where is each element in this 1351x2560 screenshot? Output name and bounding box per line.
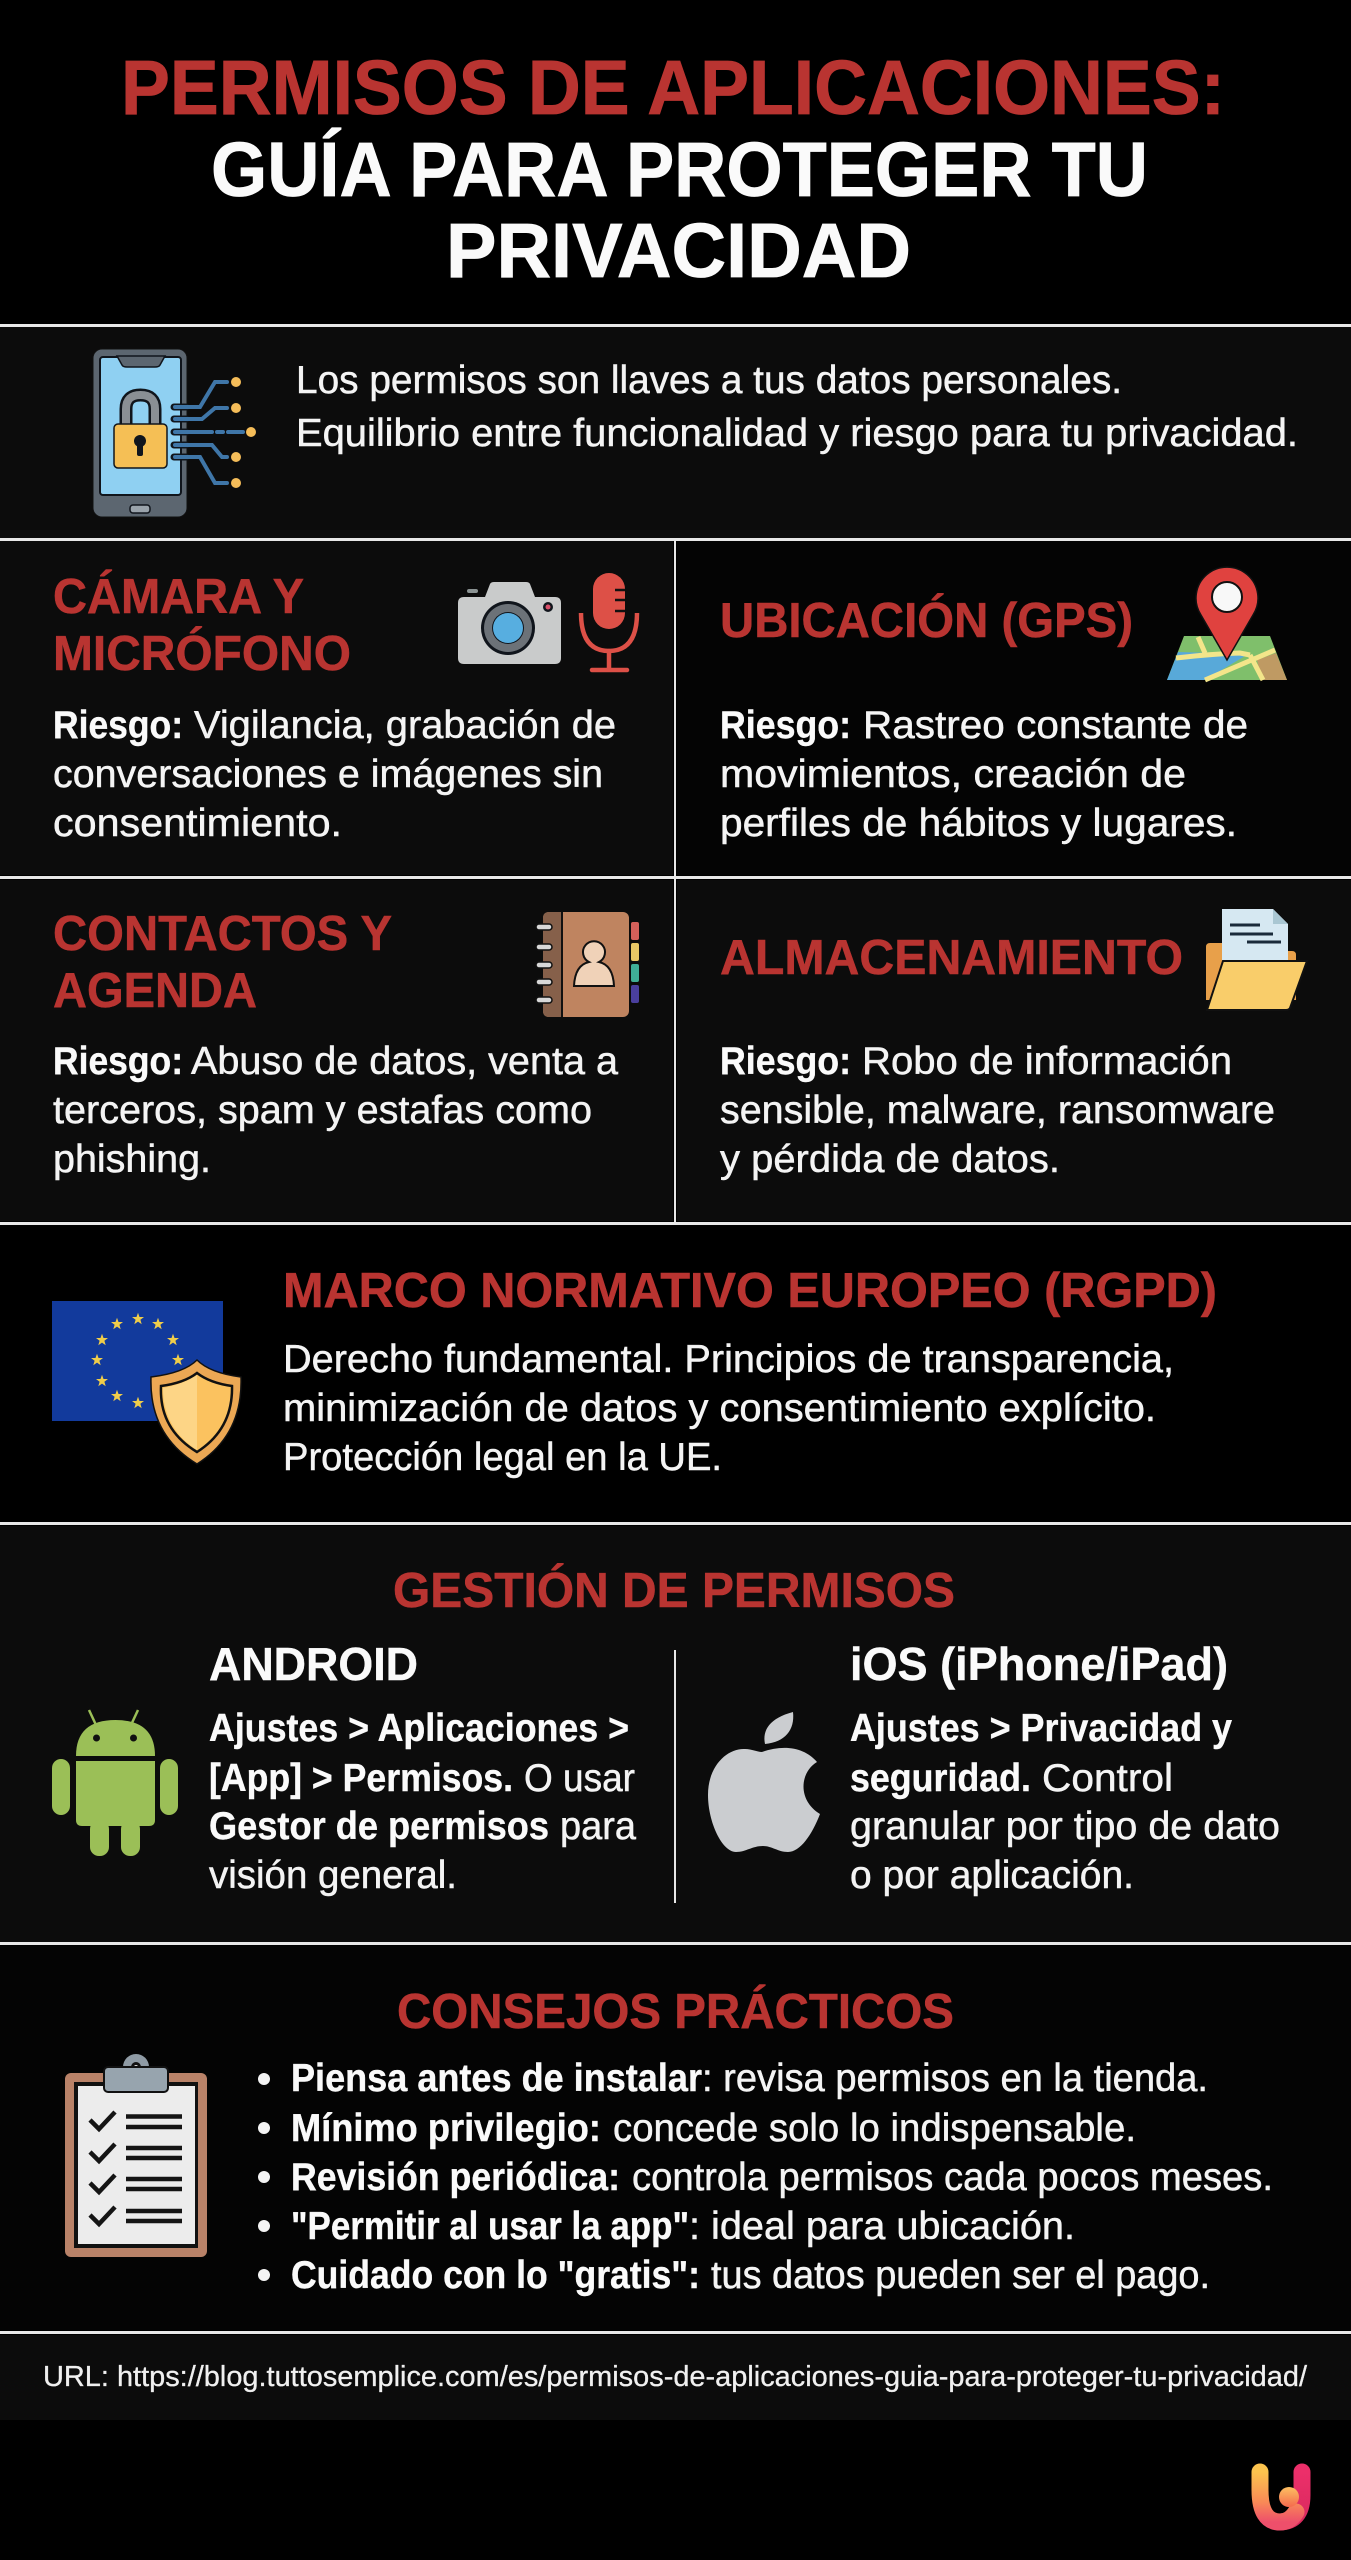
panel: marco normativo xyxy=(0,1226,1351,1521)
android steps: Gestor de permisos xyxy=(209,1805,549,1848)
panel: contactos y agenda xyxy=(0,880,673,1221)
panel: introduction xyxy=(0,326,1351,538)
heading: MICRÓFONO xyxy=(53,626,351,681)
icon: phone with padlock xyxy=(93,349,256,517)
risk text xyxy=(53,704,616,845)
icon: EU flag with shield xyxy=(52,1301,241,1464)
heading xyxy=(53,907,392,1018)
ios steps: o por aplicación. xyxy=(850,1854,1134,1897)
heading: CONTACTOS Y xyxy=(53,907,392,961)
body text: Protección legal en la UE. xyxy=(283,1436,722,1479)
body text: minimización de datos y consentimiento explícito. xyxy=(283,1387,1156,1430)
android steps: O usar xyxy=(524,1757,635,1800)
icon: android xyxy=(52,1710,178,1856)
icon: folder with document xyxy=(1206,909,1307,1010)
intro text: Los permisos son llaves a tus datos personales. xyxy=(296,359,1122,402)
heading: MARCO NORMATIVO EUROPEO (RGPD) xyxy=(283,1264,1217,1318)
risk text: conversaciones e imágenes sin xyxy=(53,753,603,796)
risk text: Rastreo constante de xyxy=(863,704,1248,747)
tips list: controla permisos cada pocos meses. xyxy=(632,2156,1273,2199)
title: PERMISOS DE APLICACIONES: xyxy=(121,45,1225,131)
heading: ALMACENAMIENTO xyxy=(720,931,1183,985)
risk text xyxy=(720,704,1248,845)
icon: clipboard xyxy=(65,2054,207,2257)
risk text: perfiles de hábitos y lugares. xyxy=(720,802,1237,845)
android steps: visión general. xyxy=(209,1854,457,1897)
ios steps xyxy=(850,1707,1280,1897)
heading: GESTIÓN DE PERMISOS xyxy=(393,1563,955,1618)
intro text: Equilibrio entre funcionalidad y riesgo para tu privacidad. xyxy=(296,412,1298,455)
body text: Derecho fundamental. Principios de transparencia, xyxy=(283,1338,1174,1381)
title: GUÍA PARA PROTEGER TU xyxy=(211,127,1148,213)
risk text: Riesgo: xyxy=(720,704,851,747)
title: PRIVACIDAD xyxy=(446,208,911,294)
panel: consejos prácticos xyxy=(0,1946,1351,2330)
risk text: Robo de información xyxy=(862,1040,1232,1083)
risk text: Vigilancia, grabación de xyxy=(194,704,616,747)
android steps: para xyxy=(560,1805,636,1848)
tips list: concede solo lo indispensable. xyxy=(613,2107,1136,2150)
risk text: phishing. xyxy=(53,1138,211,1181)
risk text xyxy=(720,1040,1275,1181)
logo xyxy=(1260,2472,1302,2522)
icon: address book xyxy=(536,912,639,1017)
tips list: "Permitir al usar la app" xyxy=(291,2205,689,2248)
panel: footer url xyxy=(0,2335,1351,2420)
risk text: Riesgo: xyxy=(53,1040,183,1083)
risk text: terceros, spam y estafas como xyxy=(53,1089,592,1132)
intro text xyxy=(296,359,1298,455)
ios steps: Ajustes > Privacidad y xyxy=(850,1707,1232,1750)
android steps: Ajustes > Aplicaciones > xyxy=(209,1707,629,1750)
tips list: Mínimo privilegio: xyxy=(291,2107,601,2150)
risk text: Riesgo: xyxy=(53,704,183,747)
risk text: sensible, malware, ransomware xyxy=(720,1089,1275,1132)
tips list: : revisa permisos en la tienda. xyxy=(702,2057,1208,2100)
heading xyxy=(53,570,351,681)
panel: ubicación xyxy=(677,541,1351,875)
android steps xyxy=(209,1707,636,1897)
heading: CONSEJOS PRÁCTICOS xyxy=(397,1985,954,2039)
heading: CÁMARA Y xyxy=(53,570,304,624)
panel: cámara y micrófono xyxy=(0,541,673,875)
panel: almacenamiento xyxy=(677,880,1351,1221)
ios heading: iOS (iPhone/iPad) xyxy=(850,1638,1228,1690)
android heading: ANDROID xyxy=(209,1638,418,1690)
tips list: : ideal para ubicación. xyxy=(689,2205,1075,2248)
tips list: tus datos pueden ser el pago. xyxy=(711,2254,1210,2297)
ios steps: Control xyxy=(1042,1757,1173,1800)
icon: map pin xyxy=(1167,567,1287,680)
heading: AGENDA xyxy=(53,964,257,1018)
icon: camera xyxy=(458,582,561,664)
risk text: Riesgo: xyxy=(720,1040,851,1083)
ios steps: granular por tipo de dato xyxy=(850,1805,1280,1848)
risk text: movimientos, creación de xyxy=(720,753,1186,796)
risk text: y pérdida de datos. xyxy=(720,1138,1060,1181)
body text xyxy=(283,1338,1174,1479)
tips list: Cuidado con lo "gratis": xyxy=(291,2254,700,2297)
tips list: Revisión periódica: xyxy=(291,2156,620,2199)
risk text: consentimiento. xyxy=(53,802,342,845)
android steps: [App] > Permisos. xyxy=(209,1757,513,1800)
risk text: Abuso de datos, venta a xyxy=(191,1040,618,1083)
risk text xyxy=(53,1040,618,1181)
icon: microphone xyxy=(581,573,637,670)
tips list xyxy=(258,2057,1273,2297)
ios steps: seguridad. xyxy=(850,1757,1031,1800)
title xyxy=(121,45,1225,294)
icon: apple xyxy=(708,1712,820,1852)
url: URL: https://blog.tuttosemplice.com/es/permisos-de-aplicaciones-guia-para-proteger-tu-privacidad/ xyxy=(43,2361,1308,2393)
heading: UBICACIÓN (GPS) xyxy=(720,593,1133,648)
tips list: Piensa antes de instalar xyxy=(291,2057,702,2100)
panel: gestión de permisos xyxy=(0,1526,1351,1943)
